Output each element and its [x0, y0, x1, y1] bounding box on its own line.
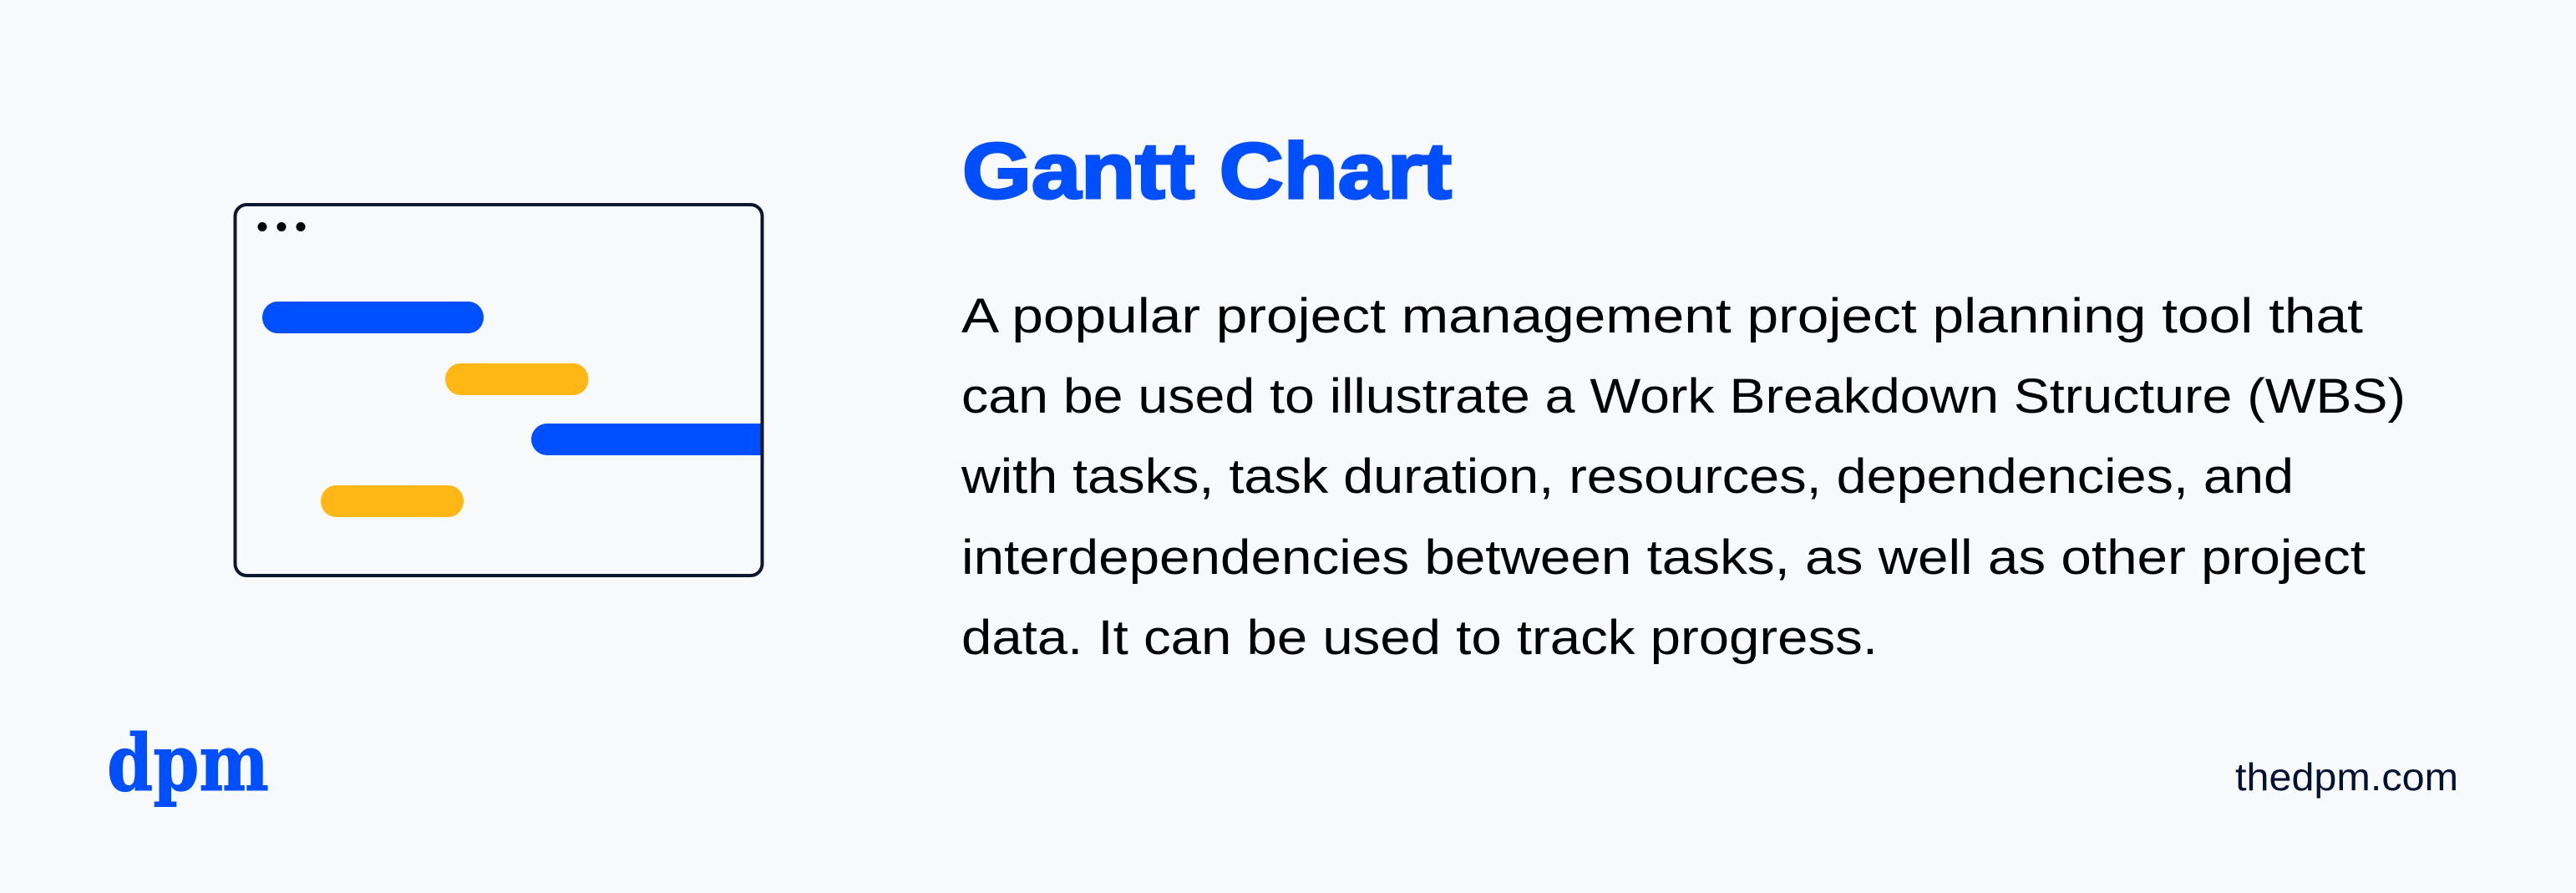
task bar 4 [321, 485, 464, 517]
description text: can be used to illustrate a Work Breakdown Structure (WBS) [961, 369, 2406, 424]
title: Gantt Chart [962, 127, 1452, 216]
window dots [257, 222, 306, 231]
window frame [236, 205, 762, 576]
task bar 1 [262, 302, 484, 333]
description text [961, 289, 2406, 665]
task bar 3 [531, 424, 760, 455]
description text: with tasks, task duration, resources, dependencies, and [961, 449, 2294, 504]
task bar 2 [445, 363, 588, 395]
description text: A popular project management project planning tool that [961, 289, 2363, 343]
description text: data. It can be used to track progress. [961, 611, 1878, 665]
description text: interdependencies between tasks, as well as other project [961, 530, 2366, 585]
logo: dpm: dpm [107, 718, 269, 809]
website url: thedpm.com [2235, 755, 2458, 799]
icon: gantt chart window [236, 205, 762, 576]
